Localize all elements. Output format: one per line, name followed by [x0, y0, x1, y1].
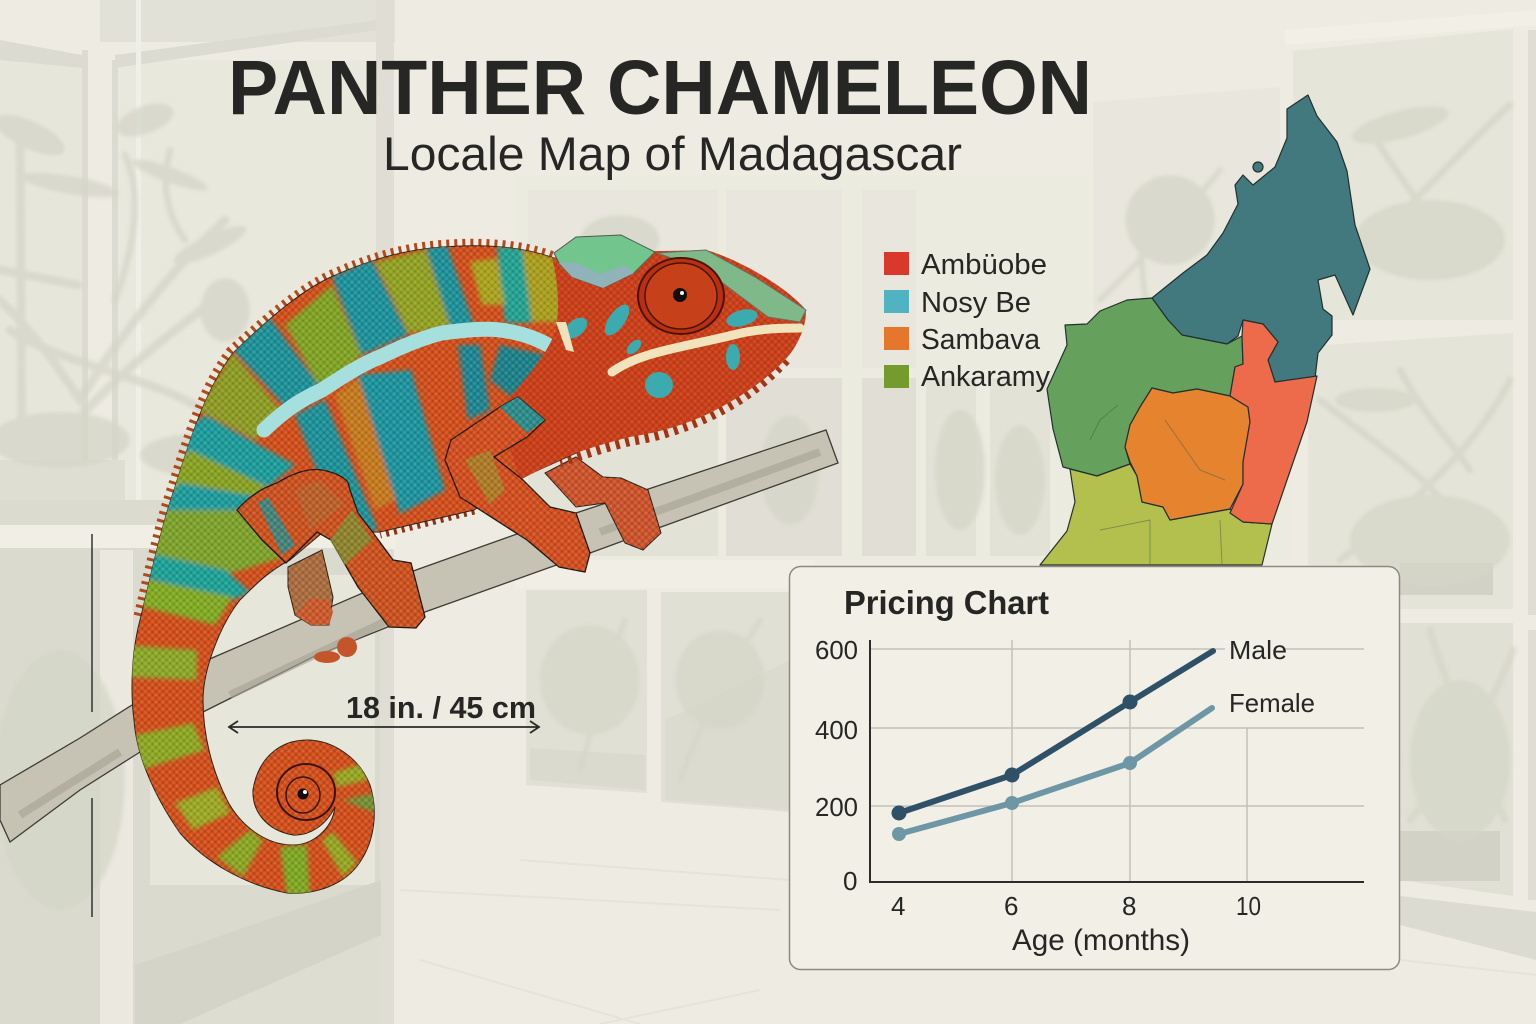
chart heading: Pricing Chart: [844, 584, 1049, 621]
region: west green: [1047, 298, 1243, 476]
title: PANTHER CHAMELEON: [228, 45, 1092, 131]
head: [498, 235, 806, 480]
x axis labels: 8: [1122, 891, 1136, 921]
floor tile lines: [400, 860, 1536, 1024]
subtitle: Locale Map of Madagascar: [383, 127, 962, 180]
y axis labels: 600: [815, 635, 858, 665]
legend: Sambava: Sambava: [921, 324, 1041, 356]
legend: Nosy Be: Nosy Be: [921, 287, 1031, 319]
green and teal stripes: [125, 245, 562, 895]
x axis labels: 4: [891, 891, 905, 921]
y axis labels: 200: [815, 792, 858, 822]
length arrow: [229, 721, 539, 733]
map of Madagascar: [1040, 95, 1370, 565]
near hind leg: [237, 470, 425, 628]
far hind leg: [288, 550, 357, 657]
y axis labels: 0: [843, 866, 857, 896]
right enclosures: [1093, 10, 1536, 960]
region: north teal: [1152, 95, 1370, 382]
region: east red: [1230, 320, 1317, 524]
left enclosure: [0, 0, 395, 1024]
background plants: [0, 97, 1513, 910]
region borders: [1090, 405, 1225, 565]
branch: [0, 430, 838, 842]
line: male: [892, 651, 1213, 820]
line: female: [892, 708, 1212, 841]
legend: Ankaramy: Ankaramy: [921, 361, 1050, 393]
toes under branch: [337, 637, 357, 657]
cream spike: [556, 322, 574, 352]
length label: 18 in. / 45 cm: [346, 690, 536, 725]
body texture: [132, 246, 600, 893]
x axis labels: [891, 891, 1261, 921]
label: male: Male: [1229, 635, 1287, 665]
casque: [554, 235, 655, 288]
chameleon: [125, 235, 806, 895]
center enclosure: [515, 175, 1290, 812]
belly fringe: [380, 510, 474, 534]
panel: pricing chart: [790, 566, 1400, 970]
x axis title: Age (months): [1012, 924, 1190, 957]
y axis labels: [815, 635, 858, 896]
dorsal crest: [138, 244, 552, 618]
far front leg: [545, 457, 661, 550]
chart gridlines and axes: [870, 640, 1364, 882]
body and tail base: [132, 246, 600, 893]
region: south yellow-green: [1040, 464, 1272, 565]
size measurement: [92, 534, 539, 917]
body colour bands: [125, 245, 562, 895]
legend: Ambuobe: Ambüobe: [921, 249, 1047, 281]
island: Nosy Be: [1253, 162, 1263, 172]
tail spiral: [277, 764, 335, 820]
region: central orange: [1125, 388, 1250, 520]
height ruler: [91, 534, 93, 917]
near front leg: [445, 397, 590, 572]
mouth line: [612, 328, 800, 372]
white lateral stripe: [264, 329, 559, 430]
legend: [884, 249, 1050, 393]
eye: [638, 258, 724, 334]
label: female: Female: [1229, 688, 1315, 718]
y axis labels: 400: [815, 715, 858, 745]
head crest: [657, 250, 806, 322]
x axis labels: 10: [1236, 891, 1261, 921]
jaw fringe: [560, 360, 786, 462]
teal head markings: [561, 301, 760, 398]
x axis labels: 6: [1004, 891, 1018, 921]
